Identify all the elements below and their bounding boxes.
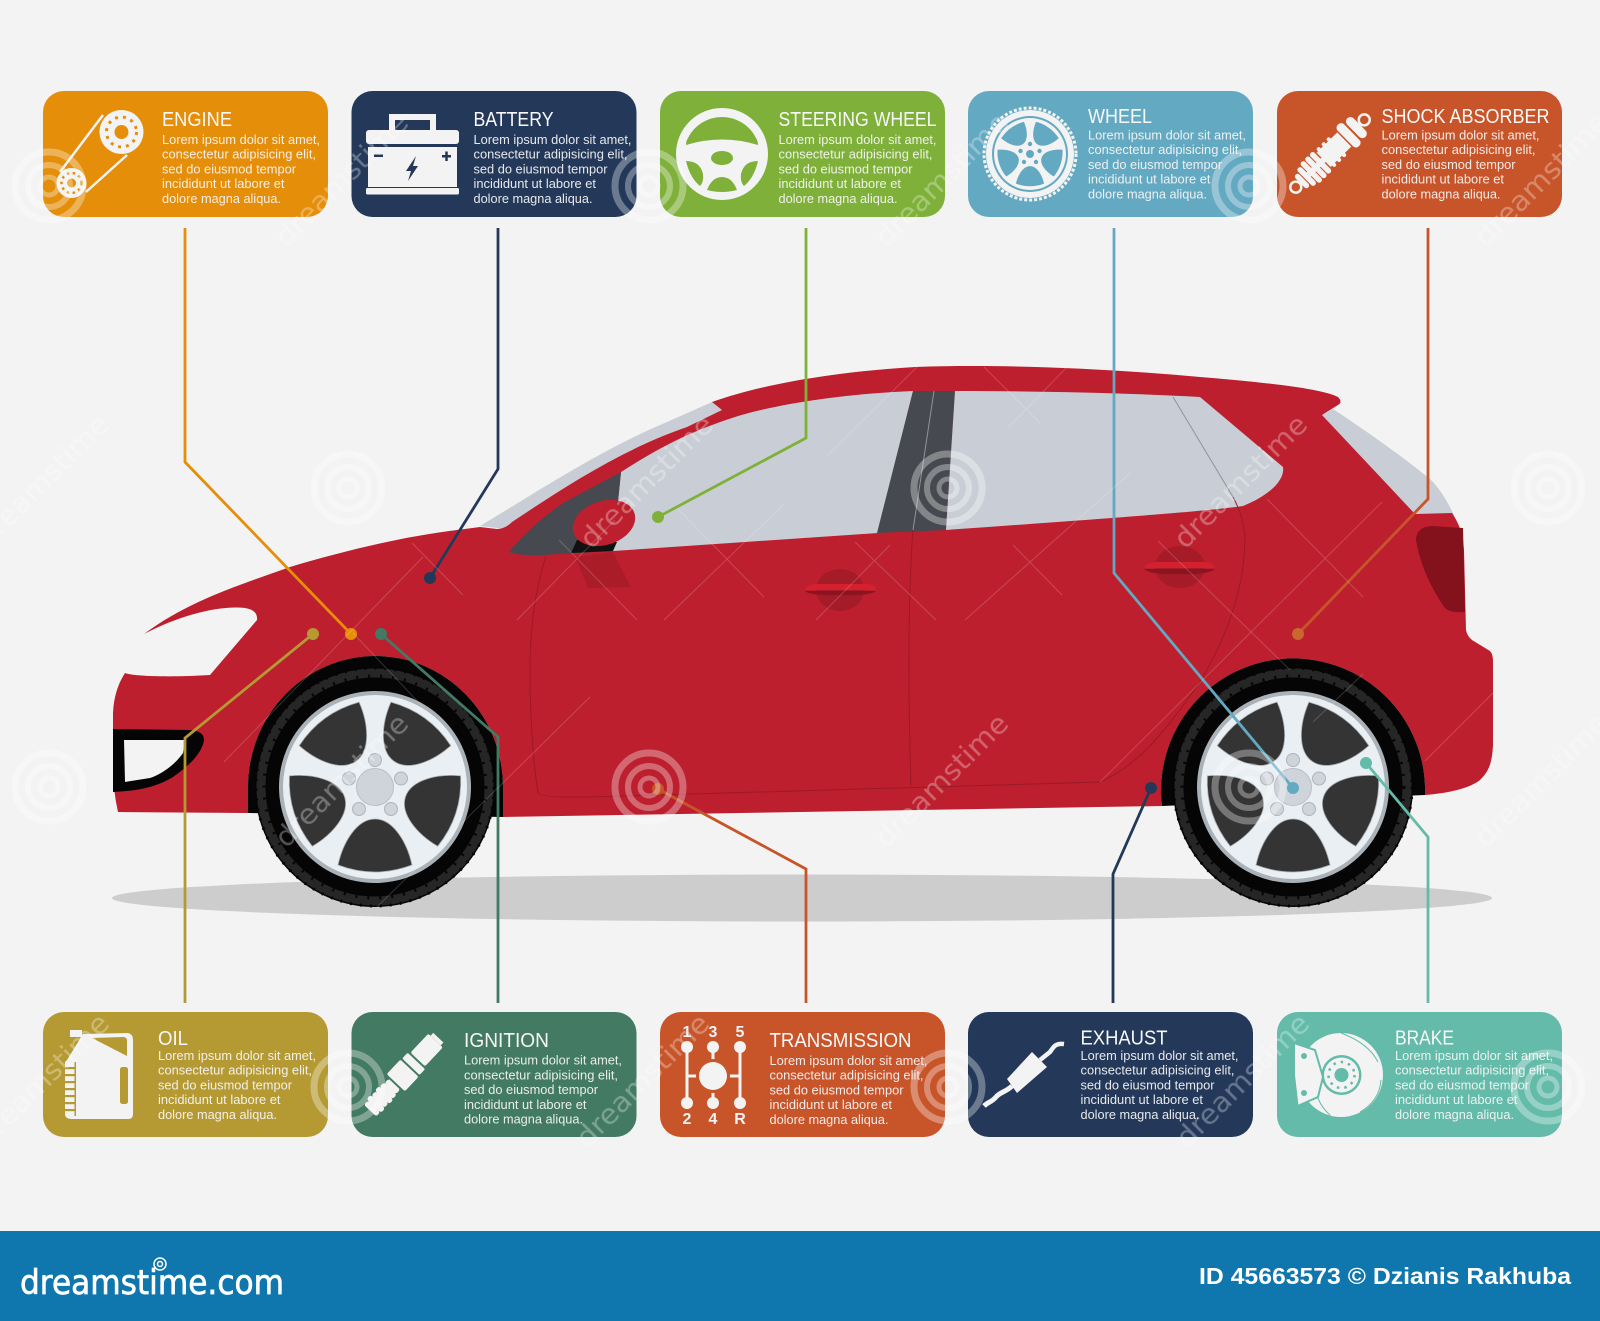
connector: shock absorber [1292, 228, 1428, 640]
text block: consectetur adipisicing elit, [464, 1068, 618, 1082]
text block: sed do eiusmod tempor [1395, 1078, 1529, 1092]
text block: consectetur adipisicing elit, [1080, 1064, 1234, 1078]
rear door handle [1144, 546, 1215, 588]
text block: consectetur adipisicing elit, [778, 148, 932, 162]
footer logo spiral [154, 1258, 166, 1270]
text block: sed do eiusmod tempor [162, 162, 296, 176]
wheel arches [1161, 658, 1425, 806]
icon: wheel [984, 108, 1076, 200]
text block: incididunt ut labore et [474, 177, 596, 191]
text block: dolore magna aliqua. [1088, 187, 1207, 201]
text block: consectetur adipisicing elit, [1395, 1064, 1549, 1078]
text block: dolore magna aliqua. [1382, 187, 1500, 201]
text block: incididunt ut labore et [158, 1093, 281, 1107]
connector: brake [1360, 757, 1428, 1003]
icon: gear shift [681, 1024, 746, 1128]
text block: Lorem ipsum dolor sit amet, [464, 1054, 622, 1068]
text block: incididunt ut labore et [1080, 1093, 1203, 1107]
text block [474, 133, 632, 206]
text block: consectetur adipisicing elit, [1088, 143, 1242, 157]
text block: consectetur adipisicing elit, [162, 148, 316, 162]
text block: incididunt ut labore et [778, 177, 901, 191]
panel: shock absorber [1277, 91, 1562, 217]
watermark text: dreamstime [1167, 408, 1314, 555]
rear window strip [1322, 409, 1454, 515]
text block: incididunt ut labore et [1382, 173, 1504, 187]
text block: incididunt ut labore et [464, 1098, 587, 1112]
text block [1395, 1049, 1553, 1122]
text block: incididunt ut labore et [1088, 173, 1211, 187]
text block: sed do eiusmod tempor [1382, 158, 1516, 172]
icon: gear shift: 2 [683, 1111, 692, 1128]
text block: sed do eiusmod tempor [770, 1083, 904, 1097]
text block: consectetur adipisicing elit, [474, 148, 628, 162]
heading: BRAKE [1395, 1028, 1454, 1050]
text block: dolore magna aliqua. [778, 192, 898, 206]
watermark text: dreamstime [268, 106, 415, 253]
panel: steering wheel [660, 91, 945, 217]
text block: sed do eiusmod tempor [1088, 158, 1222, 172]
heading: OIL [158, 1028, 188, 1050]
text block: Lorem ipsum dolor sit amet, [158, 1049, 316, 1063]
front quarter glass [509, 472, 621, 555]
mirror [567, 492, 641, 554]
icon: spark plug [361, 1029, 447, 1119]
icon: shock absorber [1281, 105, 1379, 202]
heading: TRANSMISSION [770, 1030, 912, 1052]
panel: transmission [660, 1012, 945, 1137]
text block: consectetur adipisicing elit, [770, 1069, 924, 1083]
watermark text: dreamstime [573, 408, 720, 555]
rear side window [946, 391, 1283, 530]
icon: oil canister [65, 1030, 133, 1119]
watermark text: dreamstime [868, 106, 1015, 253]
mirror base [571, 540, 617, 553]
connector: wheel [1114, 228, 1299, 794]
text block: Lorem ipsum dolor sit amet, [162, 133, 320, 147]
footer bar [0, 1231, 1600, 1321]
connector: steering wheel [652, 228, 806, 523]
text block: dolore magna aliqua. [158, 1108, 277, 1122]
heading: SHOCK ABSORBER [1382, 106, 1550, 128]
text block [778, 133, 936, 206]
text block: Lorem ipsum dolor sit amet, [1080, 1049, 1239, 1063]
heading: ENGINE [162, 109, 232, 131]
windshield strip [480, 402, 723, 529]
text block: incididunt ut labore et [1395, 1093, 1518, 1107]
watermark text: dreamstime [868, 707, 1015, 854]
heading: STEERING WHEEL [778, 109, 936, 131]
front side window [613, 391, 913, 551]
connector: battery [424, 228, 498, 584]
fog lamp [113, 729, 204, 792]
rear wheel [1173, 667, 1413, 907]
text block: incididunt ut labore et [162, 177, 285, 191]
text block [1088, 128, 1246, 201]
text block: Lorem ipsum dolor sit amet, [770, 1054, 928, 1068]
icon: gear shift: 1 [683, 1024, 692, 1041]
text block: dolore magna aliqua. [162, 192, 281, 206]
car body [113, 366, 1493, 817]
watermark spirals [15, 152, 1582, 1121]
ground shadow [112, 874, 1492, 922]
panel: engine [43, 91, 328, 217]
icon: engine belt [56, 110, 144, 198]
icon: gear shift: 4 [709, 1111, 718, 1128]
icon: gear shift: 3 [709, 1024, 718, 1041]
front wheel [255, 667, 495, 907]
connector: transmission [652, 783, 806, 1003]
panel: battery [352, 91, 636, 217]
panel: ignition [352, 1012, 636, 1137]
panel: brake [1277, 1012, 1562, 1137]
tail light [1416, 526, 1465, 612]
text block: dolore magna aliqua. [464, 1112, 583, 1126]
heading: WHEEL [1088, 106, 1152, 128]
panel: oil [43, 1012, 328, 1137]
text block [770, 1054, 928, 1127]
footer logo: dreamstime.com [20, 1263, 284, 1303]
text block [1080, 1049, 1238, 1122]
icon: muffler [984, 1044, 1064, 1106]
text block: Lorem ipsum dolor sit amet, [1382, 128, 1540, 142]
text block: dolore magna aliqua. [474, 192, 592, 206]
icon: gear shift: R [734, 1111, 746, 1128]
fog lamp glass [124, 740, 185, 782]
panel: exhaust [968, 1012, 1253, 1137]
text block: dolore magna aliqua. [770, 1113, 888, 1127]
text block: consectetur adipisicing elit, [158, 1064, 312, 1078]
text block: sed do eiusmod tempor [158, 1078, 292, 1092]
connector: oil [185, 628, 319, 1003]
text block [162, 133, 320, 206]
connector: exhaust [1113, 782, 1157, 1003]
heading: BATTERY [474, 109, 554, 131]
text block: sed do eiusmod tempor [474, 162, 608, 176]
text block: dolore magna aliqua. [1395, 1108, 1514, 1122]
text block: sed do eiusmod tempor [1080, 1078, 1214, 1092]
text block [464, 1054, 622, 1126]
b pillar [877, 391, 955, 533]
car [113, 366, 1493, 907]
text block: sed do eiusmod tempor [464, 1083, 598, 1097]
heading: EXHAUST [1080, 1028, 1168, 1050]
watermark text: dreamstime [569, 1007, 716, 1154]
text block: sed do eiusmod tempor [778, 162, 912, 176]
front door handle [805, 569, 876, 611]
icon: battery [366, 114, 459, 194]
watermark text: dreamstime [268, 707, 415, 854]
icon: brake disc [1294, 1033, 1383, 1117]
text block: Lorem ipsum dolor sit amet, [778, 133, 937, 147]
connector: engine [185, 228, 357, 640]
footer credit: ID 45663573 © Dzianis Rakhuba [1199, 1263, 1571, 1289]
text block [1382, 128, 1540, 201]
icon: gear shift: 5 [736, 1024, 745, 1041]
text block: dolore magna aliqua. [1080, 1108, 1200, 1122]
text block: consectetur adipisicing elit, [1382, 143, 1536, 157]
door glass lines [913, 391, 1233, 530]
text block: Lorem ipsum dolor sit amet, [1395, 1049, 1553, 1063]
text block [158, 1049, 316, 1122]
watermark text: dreamstime [1169, 1007, 1316, 1154]
door lines [530, 497, 1245, 797]
text block: Lorem ipsum dolor sit amet, [1088, 128, 1246, 142]
panel: wheel [968, 91, 1253, 217]
mirror shadow [575, 552, 631, 588]
text block: incididunt ut labore et [770, 1098, 892, 1112]
text block: Lorem ipsum dolor sit amet, [474, 133, 632, 147]
watermark text [0, 106, 1600, 1154]
icon: steering wheel [676, 108, 768, 200]
heading: IGNITION [464, 1030, 549, 1052]
connector: ignition [375, 628, 498, 1003]
